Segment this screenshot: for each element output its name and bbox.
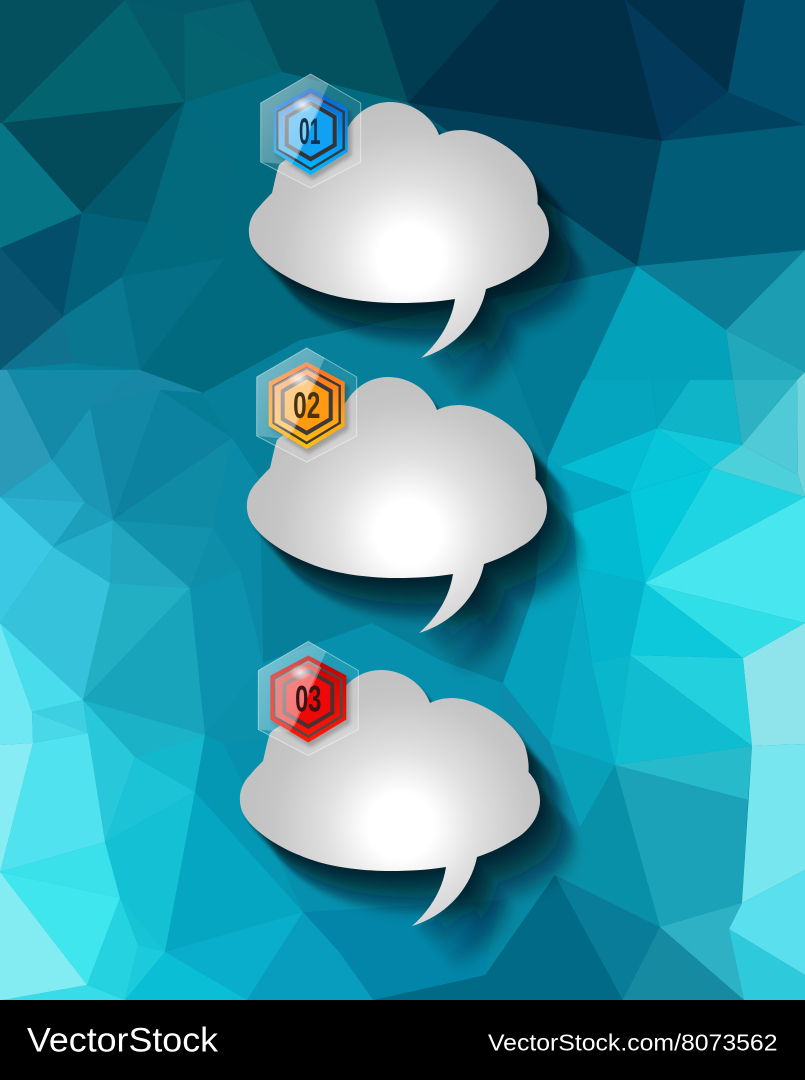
inner gloss bbox=[278, 93, 324, 159]
glass gloss bbox=[261, 74, 329, 165]
speech cloud 2 bbox=[247, 377, 591, 685]
footer brand: VectorStock bbox=[27, 1022, 219, 1060]
inner gloss bbox=[274, 367, 320, 433]
glass gloss bbox=[258, 642, 326, 732]
speech cloud 3 bbox=[240, 670, 584, 978]
badge 01: blue glass hexagon bbox=[261, 74, 361, 188]
number 03: 03 bbox=[295, 678, 321, 720]
inner gloss bbox=[275, 660, 321, 726]
glass gloss bbox=[257, 348, 325, 439]
number 02: 02 bbox=[293, 385, 320, 426]
badge 03: red glass hexagon bbox=[258, 642, 358, 756]
speech cloud 1 bbox=[249, 102, 593, 410]
footer band bbox=[0, 1000, 805, 1080]
footer image id: VectorStock.com/8073562 bbox=[488, 1030, 778, 1056]
badge 02: orange glass hexagon bbox=[257, 348, 357, 462]
number 01: 01 bbox=[299, 111, 320, 153]
